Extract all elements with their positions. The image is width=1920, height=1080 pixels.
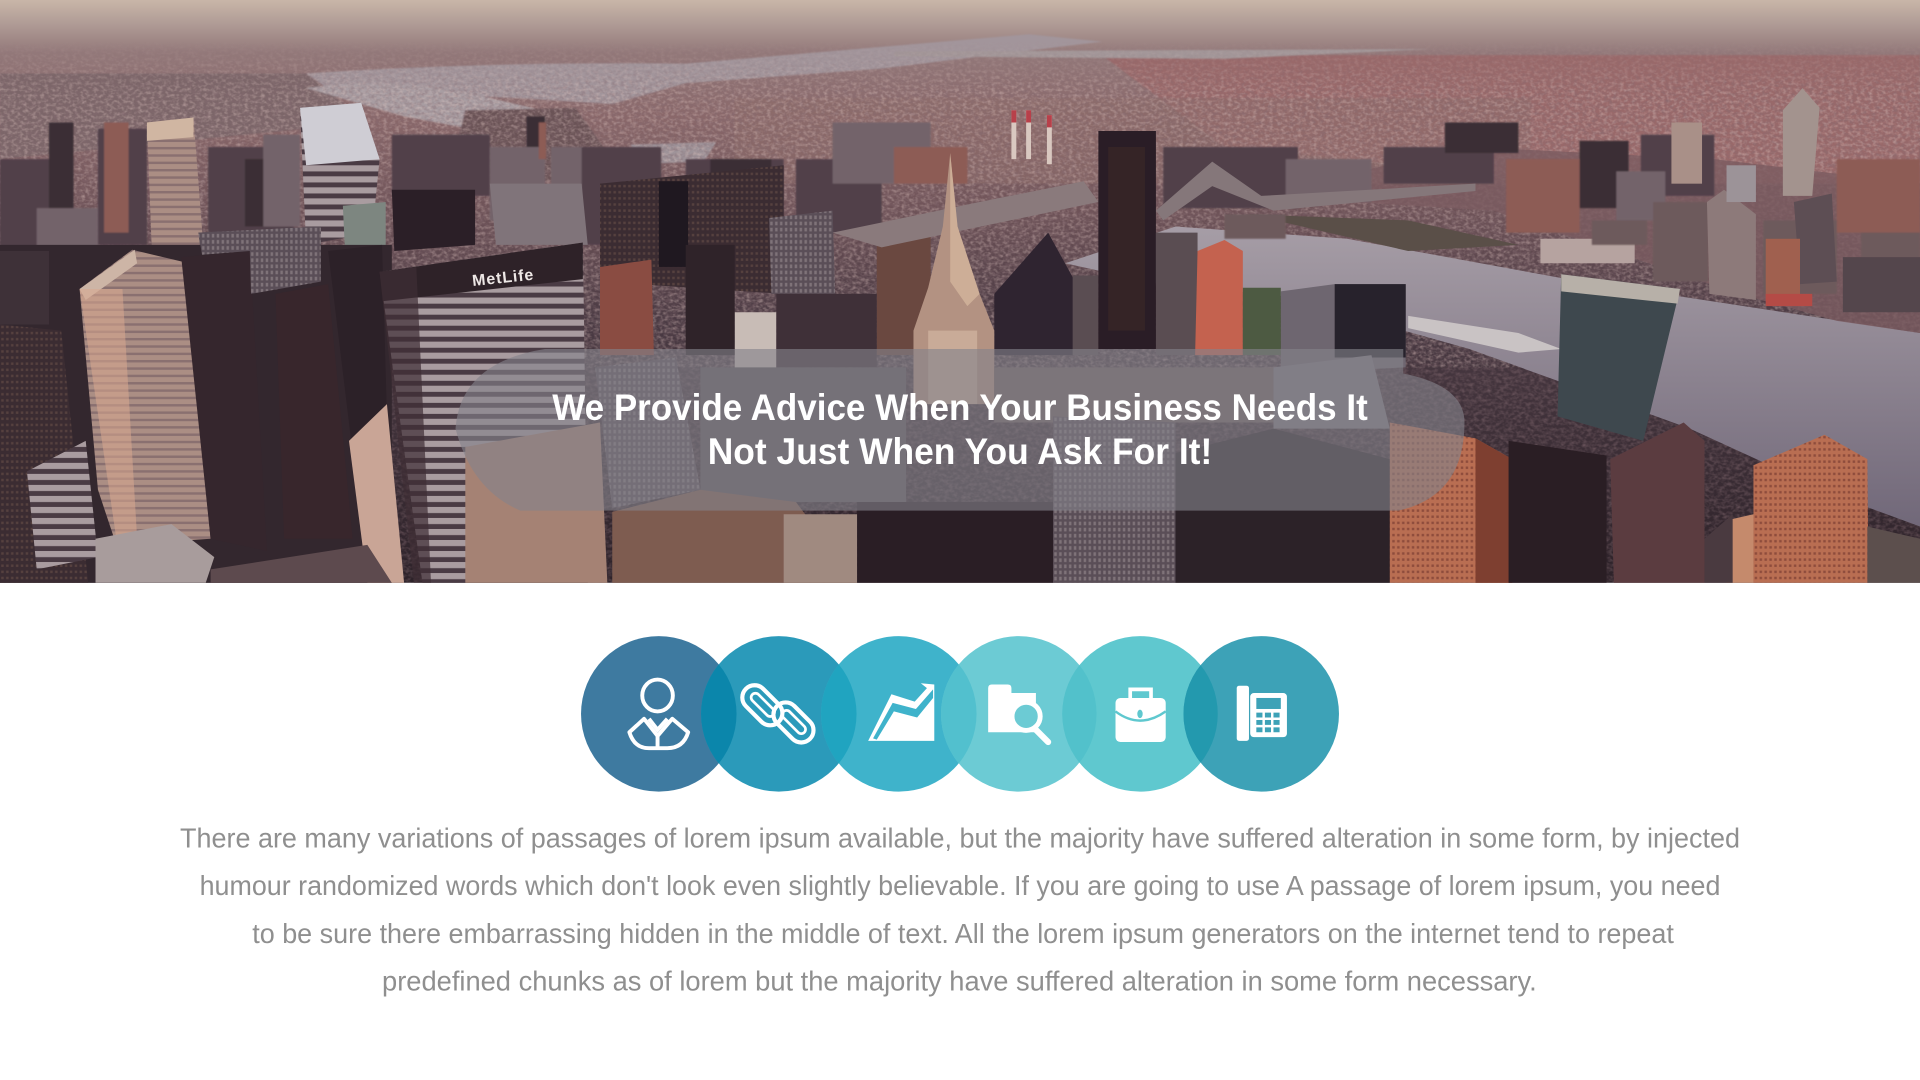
headline xyxy=(552,386,1368,472)
grey/dark block by river xyxy=(1281,284,1406,373)
MetLife building: MetLife xyxy=(471,267,534,290)
icon: briefcase xyxy=(1116,689,1166,742)
body paragraph: There are many variations of passages of lorem ipsum available, but the majority have suffered alteration in some form, by injected xyxy=(180,822,1740,853)
foreground buildings beneath panel xyxy=(465,422,607,583)
body paragraph: humour randomized words which don't look even slightly believable. If you are going to use A passage of lorem ipsum, you need xyxy=(200,870,1720,901)
tall left peach tower xyxy=(80,250,211,545)
icon: chain links xyxy=(737,680,819,748)
icon: person xyxy=(629,680,688,748)
MetLife building xyxy=(380,242,588,583)
Chrysler building xyxy=(913,153,994,404)
far left towers xyxy=(147,118,203,251)
dark slim tower xyxy=(1098,131,1156,349)
body paragraph: predefined chunks as of lorem but the majority have suffered alteration in some form necessary. xyxy=(382,966,1537,997)
translucent headline panel xyxy=(456,349,1464,511)
icon: rising chart xyxy=(868,683,934,741)
bridge xyxy=(833,181,1098,247)
red tower xyxy=(1195,240,1243,355)
icon: folder with magnifier xyxy=(988,684,1048,742)
UN building xyxy=(1558,274,1680,441)
left foreground base xyxy=(0,245,392,583)
far towers right xyxy=(1783,88,1820,196)
hero photo: aerial city skyline xyxy=(0,0,1920,583)
headline: We Provide Advice When Your Business Needs It xyxy=(552,386,1368,428)
icon: desk phone xyxy=(1237,686,1287,741)
headline: Not Just When You Ask For It! xyxy=(708,430,1212,472)
overlapping icon circles xyxy=(581,636,1339,792)
stacks xyxy=(1011,110,1052,164)
mid skyline layer xyxy=(0,116,1920,294)
river xyxy=(1065,227,1920,527)
body paragraph: to be sure there embarrassing hidden in the middle of text. All the lorem ipsum generators on the internet tend to repeat xyxy=(252,918,1674,949)
body paragraph xyxy=(180,822,1740,997)
